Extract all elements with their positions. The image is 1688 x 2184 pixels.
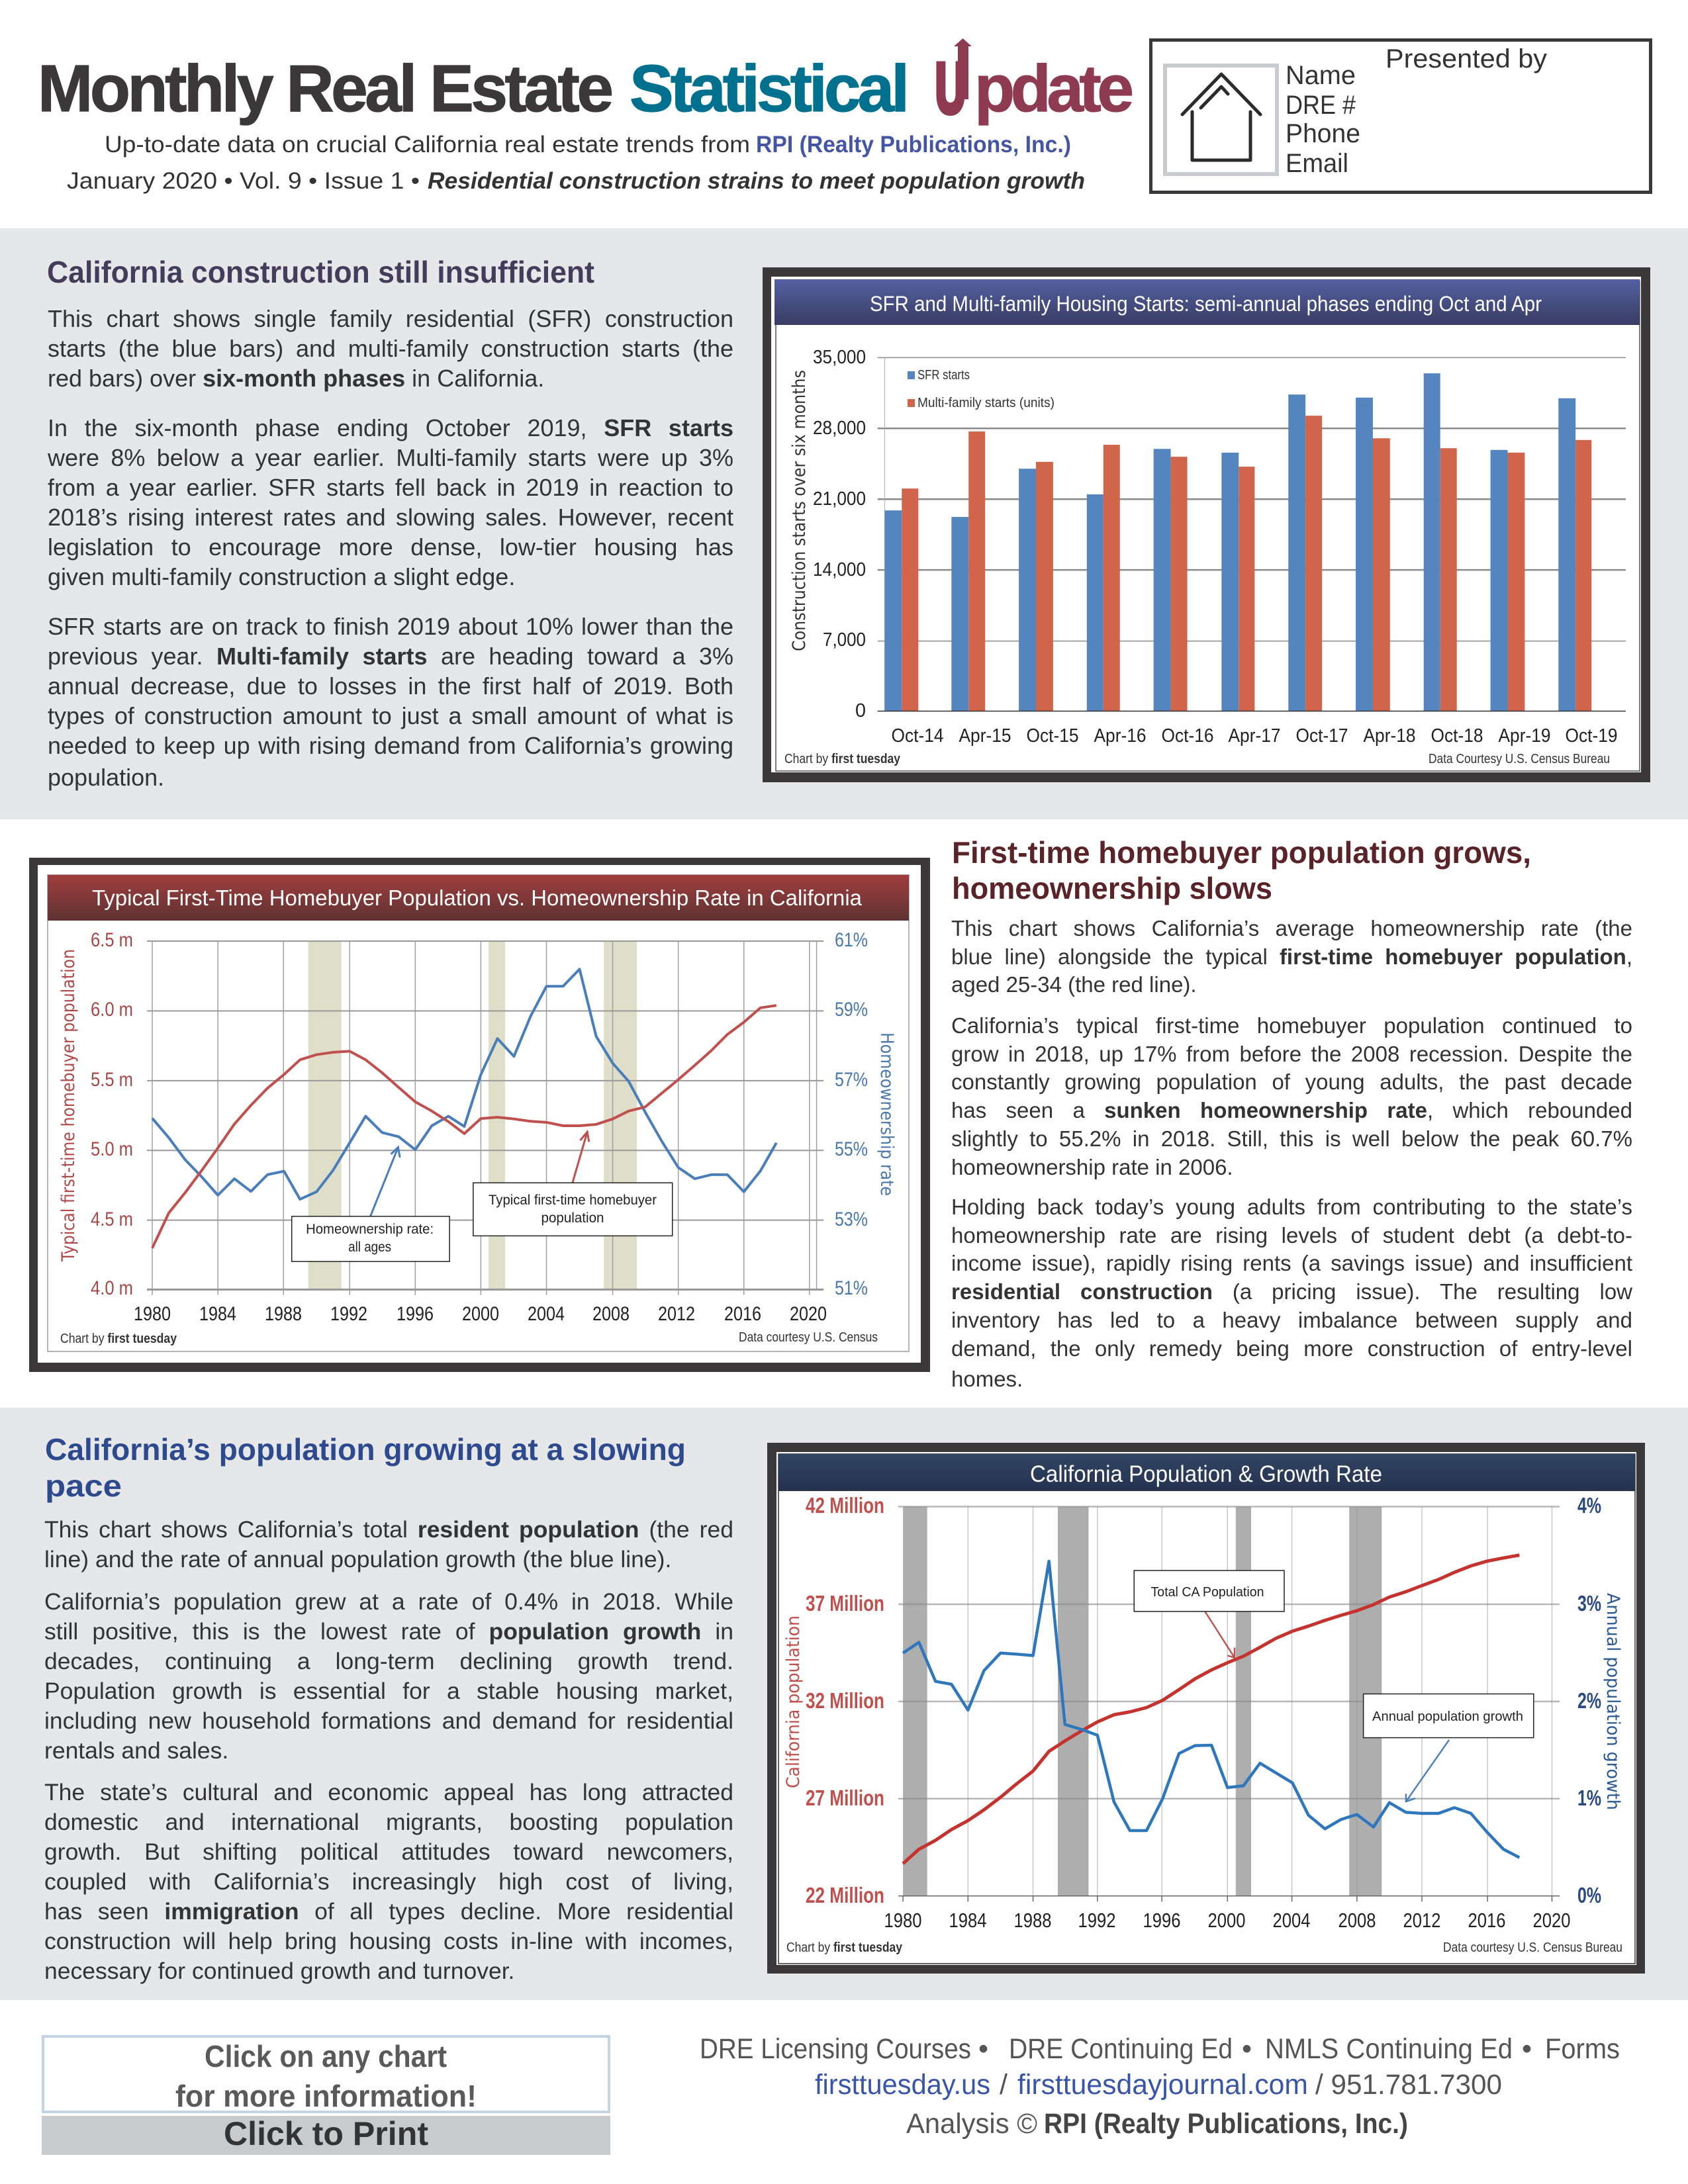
left axis title: California population (783, 1615, 804, 1788)
callout box: population (1134, 1570, 1284, 1612)
panel: homebuyer population chart (29, 858, 930, 1372)
heading: first-time homebuyer (952, 835, 1531, 905)
recession bands (308, 941, 637, 1289)
right axis title: Annual population growth (1603, 1593, 1623, 1810)
footer: links and phone: firsttuesday.us (815, 2069, 990, 2101)
x axis labels: 1980 (134, 1303, 171, 1325)
data source: Data Courtesy U.S. Census Bureau (1429, 752, 1610, 766)
x axis labels: Apr-15 (959, 725, 1011, 747)
data source: Data courtesy U.S. Census Bureau (1443, 1940, 1622, 1955)
left axis labels: 32 Million (806, 1688, 884, 1713)
text block: construction October 2019: given multi-family construction a slight edge. (48, 563, 515, 590)
subtitle: Up-to-date data on crucial California real estate trends from (105, 132, 750, 158)
chart header: SFR and Multi-family Housing Starts: semi-annual phases ending Oct and Apr (870, 292, 1542, 316)
title: U (935, 48, 966, 128)
x axis labels: 2016 (724, 1303, 761, 1325)
panel: housing starts chart (763, 267, 1650, 782)
callout text: population: Typical first-time homebuyer (489, 1193, 657, 1208)
chart credit: Chart by first tuesday (60, 1332, 177, 1346)
left axis labels (91, 929, 133, 1299)
x axis labels: Apr-19 (1499, 725, 1550, 747)
left axis labels: 4.5 m (91, 1208, 133, 1230)
text block: population migration (44, 1779, 733, 1984)
right axis labels: 3% (1577, 1591, 1601, 1615)
text block: construction October 2019: In the six-month phase ending October 2019, SFR starts (48, 414, 733, 441)
text block: population growth rate: rentals and sales. (44, 1737, 228, 1764)
text block: homebuyer 2018: constantly growing population of young adults, the past decade (951, 1069, 1632, 1094)
line chart (898, 1507, 1560, 1901)
chart header (774, 279, 1640, 325)
text block: population migration: construction will help bring housing costs in-line with incomes, (44, 1928, 733, 1954)
text block: population migration: has seen immigration of all types decline. More residential (44, 1898, 733, 1925)
footer: links and phone: / 951.781.7300 (1315, 2069, 1502, 2101)
text block: population growth rate (44, 1588, 733, 1764)
text block: construction outlook: SFR starts are on track to finish 2019 about 10% lower than the (48, 613, 733, 640)
left axis labels: 42 Million (806, 1493, 884, 1518)
title: Statistical (630, 52, 910, 126)
text block: population migration: domestic and international migrants, boosting population (44, 1809, 733, 1835)
left axis title: Typical first-time homebuyer population (58, 949, 79, 1262)
x axis labels: 1996 (397, 1303, 434, 1325)
text block: construction outlook (48, 613, 733, 791)
panel: presented by (1150, 40, 1651, 192)
left axis labels: 4.0 m (91, 1277, 133, 1299)
x axis labels: 1984 (949, 1909, 986, 1932)
button: click on any chart: for more information! (175, 2079, 477, 2113)
text block: homebuyer obstacles: income issue), rapidly rising rents (a savings issue) and insufficient (951, 1251, 1632, 1275)
arrow: population callout (1205, 1612, 1235, 1658)
x axis labels: 2004 (1272, 1909, 1311, 1932)
footer: links and phone: firsttuesdayjournal.com (1017, 2069, 1308, 2101)
y axis labels (813, 347, 866, 721)
left axis labels: 22 Million (806, 1883, 884, 1907)
left axis labels: 5.0 m (91, 1138, 133, 1160)
title: pdate (974, 52, 1134, 126)
text block: construction intro: red bars) over six-month phases in California. (48, 365, 544, 392)
right axis labels: 59% (835, 999, 868, 1021)
left axis labels: 27 Million (806, 1786, 884, 1810)
x axis labels: 1988 (1014, 1909, 1051, 1932)
text block: population migration: The state’s cultural and economic appeal has long attracted (44, 1779, 733, 1805)
text block: homebuyer 2018: slightly to 55.2% in 2018. Still, this is well below the peak 60.7% (951, 1126, 1632, 1151)
right axis labels: 53% (835, 1208, 868, 1230)
left axis labels: 6.5 m (91, 929, 133, 951)
x axis labels: Apr-16 (1094, 725, 1147, 747)
text block: homebuyer 2018: California’s typical first-time homebuyer population continued to (951, 1013, 1632, 1038)
text block: homebuyer intro: aged 25-34 (the red line). (951, 972, 1197, 997)
footer: courses: DRE Continuing Ed (1009, 2033, 1233, 2065)
title: Monthly Real Estate (38, 52, 614, 126)
text block: population migration: growth. But shifting political attitudes toward newcomers, (44, 1839, 733, 1865)
contact lines: DRE # (1286, 91, 1356, 120)
data source: Data courtesy U.S. Census (739, 1330, 878, 1345)
heading: population growth: California’s population growing at a slowing (45, 1432, 686, 1467)
text block: homebuyer intro: blue line) alongside the typical first-time homebuyer population, (951, 944, 1632, 969)
button: click on any chart (43, 2036, 609, 2113)
callout text: population (489, 1193, 657, 1226)
arrow: homeownership callout (370, 1148, 400, 1216)
y axis labels: 28,000 (813, 418, 866, 439)
right axis labels: 57% (835, 1069, 868, 1091)
bar chart (878, 357, 1626, 711)
text block: population intro (44, 1516, 733, 1572)
right axis labels: 61% (835, 929, 868, 951)
text block: homebuyer 2018 (951, 1013, 1632, 1179)
text block: construction outlook: population. (48, 764, 164, 791)
text block: construction outlook: needed to keep up with rising demand from California’s growing (48, 732, 733, 759)
y axis labels: 21,000 (813, 488, 866, 510)
right axis labels: 4% (1577, 1493, 1601, 1518)
button: click on any chart: Click on any chart (205, 2039, 447, 2073)
text block: homebuyer 2018: homeownership rate in 2006. (951, 1155, 1233, 1179)
text block: population intro: This chart shows California’s total resident population (the red (44, 1516, 733, 1543)
x axis labels: 2008 (1338, 1909, 1376, 1932)
y axis labels: 14,000 (813, 559, 866, 580)
callout text: homeownership (306, 1222, 434, 1255)
text block: population growth rate: still positive, this is the lowest rate of population growth in (44, 1618, 733, 1645)
footer: copyright: Analysis © (906, 2108, 1037, 2140)
text block: homebuyer intro (951, 916, 1632, 997)
arrow: growth callout (1406, 1740, 1449, 1801)
text block: population growth rate: including new household formations and demand for residential (44, 1707, 733, 1734)
heading: population growth: pace (45, 1469, 122, 1503)
panel: California population chart (767, 1443, 1645, 1974)
callout text: homeownership: all ages (348, 1240, 391, 1255)
x axis labels: 1980 (884, 1909, 921, 1932)
x axis labels: 1992 (1078, 1909, 1116, 1932)
presented by label: Presented by (1385, 44, 1547, 73)
right axis title: Homeownership rate (876, 1032, 897, 1196)
background band: bottom section (0, 1408, 1688, 2000)
text block: homebuyer obstacles: homes. (951, 1367, 1023, 1391)
text block: homebuyer obstacles: residential construction (a pricing issue). The resulting low (951, 1279, 1632, 1304)
chart header: California Population & Growth Rate (1030, 1461, 1382, 1487)
text block: population growth rate: decades, continuing a long-term declining growth trend. (44, 1648, 733, 1674)
footer: courses: • (1242, 2033, 1252, 2065)
chart header (48, 875, 909, 921)
right axis labels: 2% (1577, 1688, 1601, 1713)
growth line (903, 1561, 1519, 1858)
callout text: population: population (541, 1210, 604, 1226)
text block: population migration: necessary for continued growth and turnover. (44, 1958, 514, 1984)
footer: courses: NMLS Continuing Ed (1265, 2033, 1513, 2065)
x axis labels: Apr-18 (1364, 725, 1415, 747)
x axis labels: 2008 (592, 1303, 630, 1325)
right axis labels (835, 929, 868, 1299)
contact lines: Name (1286, 61, 1356, 90)
text block: construction October 2019: were 8% below a year earlier. Multi-family starts were up 3% (48, 444, 733, 471)
x axis labels: Oct-16 (1161, 725, 1214, 747)
text block: construction outlook: annual decrease, due to losses in the first half of 2019. Both (48, 672, 733, 700)
x axis labels: 2004 (528, 1303, 565, 1325)
heading: population growth (45, 1432, 686, 1503)
footer: courses: Forms (1545, 2033, 1620, 2065)
chart credit: Chart by first tuesday (786, 1940, 903, 1955)
callout text: growth: Annual population growth (1372, 1709, 1523, 1724)
right axis labels: 55% (835, 1138, 868, 1160)
x axis labels: 1984 (199, 1303, 236, 1325)
text block: population growth rate: Population growth is essential for a stable housing market, (44, 1678, 733, 1704)
text block: construction outlook: previous year. Multi-family starts are heading toward a 3% (48, 643, 733, 670)
text block: homebuyer obstacles: demand, the only remedy being more construction of entry-level (951, 1336, 1632, 1361)
text block: homebuyer 2018: has seen a sunken homeownership rate, which rebounded (951, 1098, 1632, 1122)
callout text: population: Total CA Population (1150, 1585, 1264, 1600)
x axis labels (134, 1303, 827, 1325)
text block: construction intro: starts (the blue bars) and multi-family construction starts (the (48, 335, 733, 362)
contact lines: Phone (1286, 119, 1360, 148)
icon: house (1165, 66, 1277, 174)
heading: first-time homebuyer: First-time homebuyer population grows, (952, 835, 1531, 870)
line chart (147, 941, 823, 1295)
homeownership line (152, 969, 776, 1199)
callout box: population (473, 1183, 673, 1236)
population line (903, 1555, 1519, 1864)
legend: SFR starts (917, 368, 970, 383)
footer: courses: • (978, 2033, 988, 2065)
x axis labels: 1988 (265, 1303, 302, 1325)
x axis labels: 2000 (1207, 1909, 1246, 1932)
contact lines (1286, 61, 1360, 178)
arrow: population callout (573, 1132, 589, 1183)
heading: construction: California construction still insufficient (47, 255, 594, 289)
text block: population intro: line) and the rate of annual population growth (the blue line). (44, 1546, 671, 1572)
x axis labels: 2020 (790, 1303, 827, 1325)
x axis labels: Apr-17 (1229, 725, 1280, 747)
x axis labels: 2012 (658, 1303, 695, 1325)
right axis labels: 0% (1577, 1883, 1601, 1907)
left axis labels (806, 1493, 884, 1907)
text block: homebuyer obstacles: homeownership rate are rising levels of student debt (a debt-to- (951, 1223, 1632, 1248)
issue line: January 2020 • Vol. 9 • Issue 1 • (67, 168, 420, 194)
heading: first-time homebuyer: homeownership slows (952, 871, 1272, 905)
text block: construction intro: This chart shows single family residential (SFR) construction (48, 305, 733, 332)
text block: population growth rate: California’s population grew at a rate of 0.4% in 2018. While (44, 1588, 733, 1615)
text block: homebuyer obstacles: inventory has led to a heavy imbalance between supply and (951, 1308, 1632, 1332)
left axis labels: 5.5 m (91, 1069, 133, 1091)
callout box: growth (1364, 1694, 1534, 1738)
x axis labels: Oct-15 (1026, 725, 1079, 747)
text block: construction October 2019: from a year earlier. SFR starts fell back in 2019 in reaction to (48, 474, 733, 501)
legend (908, 368, 1055, 410)
background band: top section (0, 228, 1688, 819)
left axis labels: 37 Million (806, 1591, 884, 1615)
x axis labels (884, 1909, 1570, 1932)
footer: courses: DRE Licensing Courses (700, 2033, 971, 2065)
text block: homebuyer intro: This chart shows California’s average homeownership rate (the (951, 916, 1632, 940)
legend: Multi-family starts (units) (917, 396, 1055, 410)
population line (152, 1005, 776, 1248)
y axis labels: 0 (855, 700, 866, 721)
left axis labels: 6.0 m (91, 999, 133, 1021)
footer: courses: • (1522, 2033, 1532, 2065)
x axis labels: 2012 (1403, 1909, 1440, 1932)
text block: construction October 2019: legislation to encourage more dense, low-tier housing has (48, 533, 733, 561)
text block: construction outlook: types of construction amount to just a small amount of what is (48, 702, 733, 729)
x axis labels: 2016 (1468, 1909, 1505, 1932)
callout text: homeownership: Homeownership rate: (306, 1222, 434, 1237)
y axis labels: 7,000 (823, 629, 866, 651)
callout box: homeownership (292, 1216, 449, 1261)
y axis title: Construction starts over six months (789, 370, 810, 651)
text block: construction October 2019: 2018’s rising interest rates and slowing sales. However, recent (48, 504, 733, 531)
x axis labels: 1996 (1143, 1909, 1181, 1932)
x axis labels: 1992 (330, 1303, 367, 1325)
subtitle: RPI (Realty Publications, Inc.) (756, 132, 1071, 158)
x axis labels: Oct-14 (891, 725, 944, 747)
x axis labels (891, 725, 1618, 747)
button: click to print: Click to Print (224, 2115, 428, 2152)
text block: construction October 2019 (48, 414, 733, 590)
contact lines: Email (1286, 149, 1348, 178)
text block: homebuyer 2018: grow in 2018, up 17% from before the 2008 recession. Despite the (951, 1042, 1632, 1066)
text block: homebuyer obstacles (951, 1195, 1632, 1391)
text block: homebuyer obstacles: Holding back today’s young adults from contributing to the state’s (951, 1195, 1632, 1219)
right axis labels (1577, 1493, 1601, 1907)
x axis labels: Oct-17 (1296, 725, 1348, 747)
issue line: Residential construction strains to meet population growth (428, 168, 1085, 194)
footer: links and phone: / (1000, 2069, 1008, 2101)
chart credit: Chart by first tuesday (784, 752, 901, 766)
icon: up arrow on the U (954, 38, 972, 99)
x axis labels: Oct-18 (1431, 725, 1483, 747)
chart header (778, 1454, 1635, 1491)
text block: construction intro (48, 305, 733, 392)
right axis labels: 1% (1577, 1786, 1601, 1810)
footer: copyright: RPI (Realty Publications, Inc.) (1044, 2108, 1408, 2140)
recession bands (903, 1507, 1382, 1896)
right axis labels: 51% (835, 1277, 868, 1299)
text block: population migration: coupled with California’s increasingly high cost of living, (44, 1868, 733, 1895)
x axis labels: Oct-19 (1565, 725, 1618, 747)
x axis labels: 2020 (1533, 1909, 1570, 1932)
button: click to print (42, 2115, 610, 2155)
chart header: Typical First-Time Homebuyer Population vs. Homeownership Rate in California (92, 886, 863, 910)
x axis labels: 2000 (462, 1303, 499, 1325)
y axis labels: 35,000 (813, 347, 866, 368)
